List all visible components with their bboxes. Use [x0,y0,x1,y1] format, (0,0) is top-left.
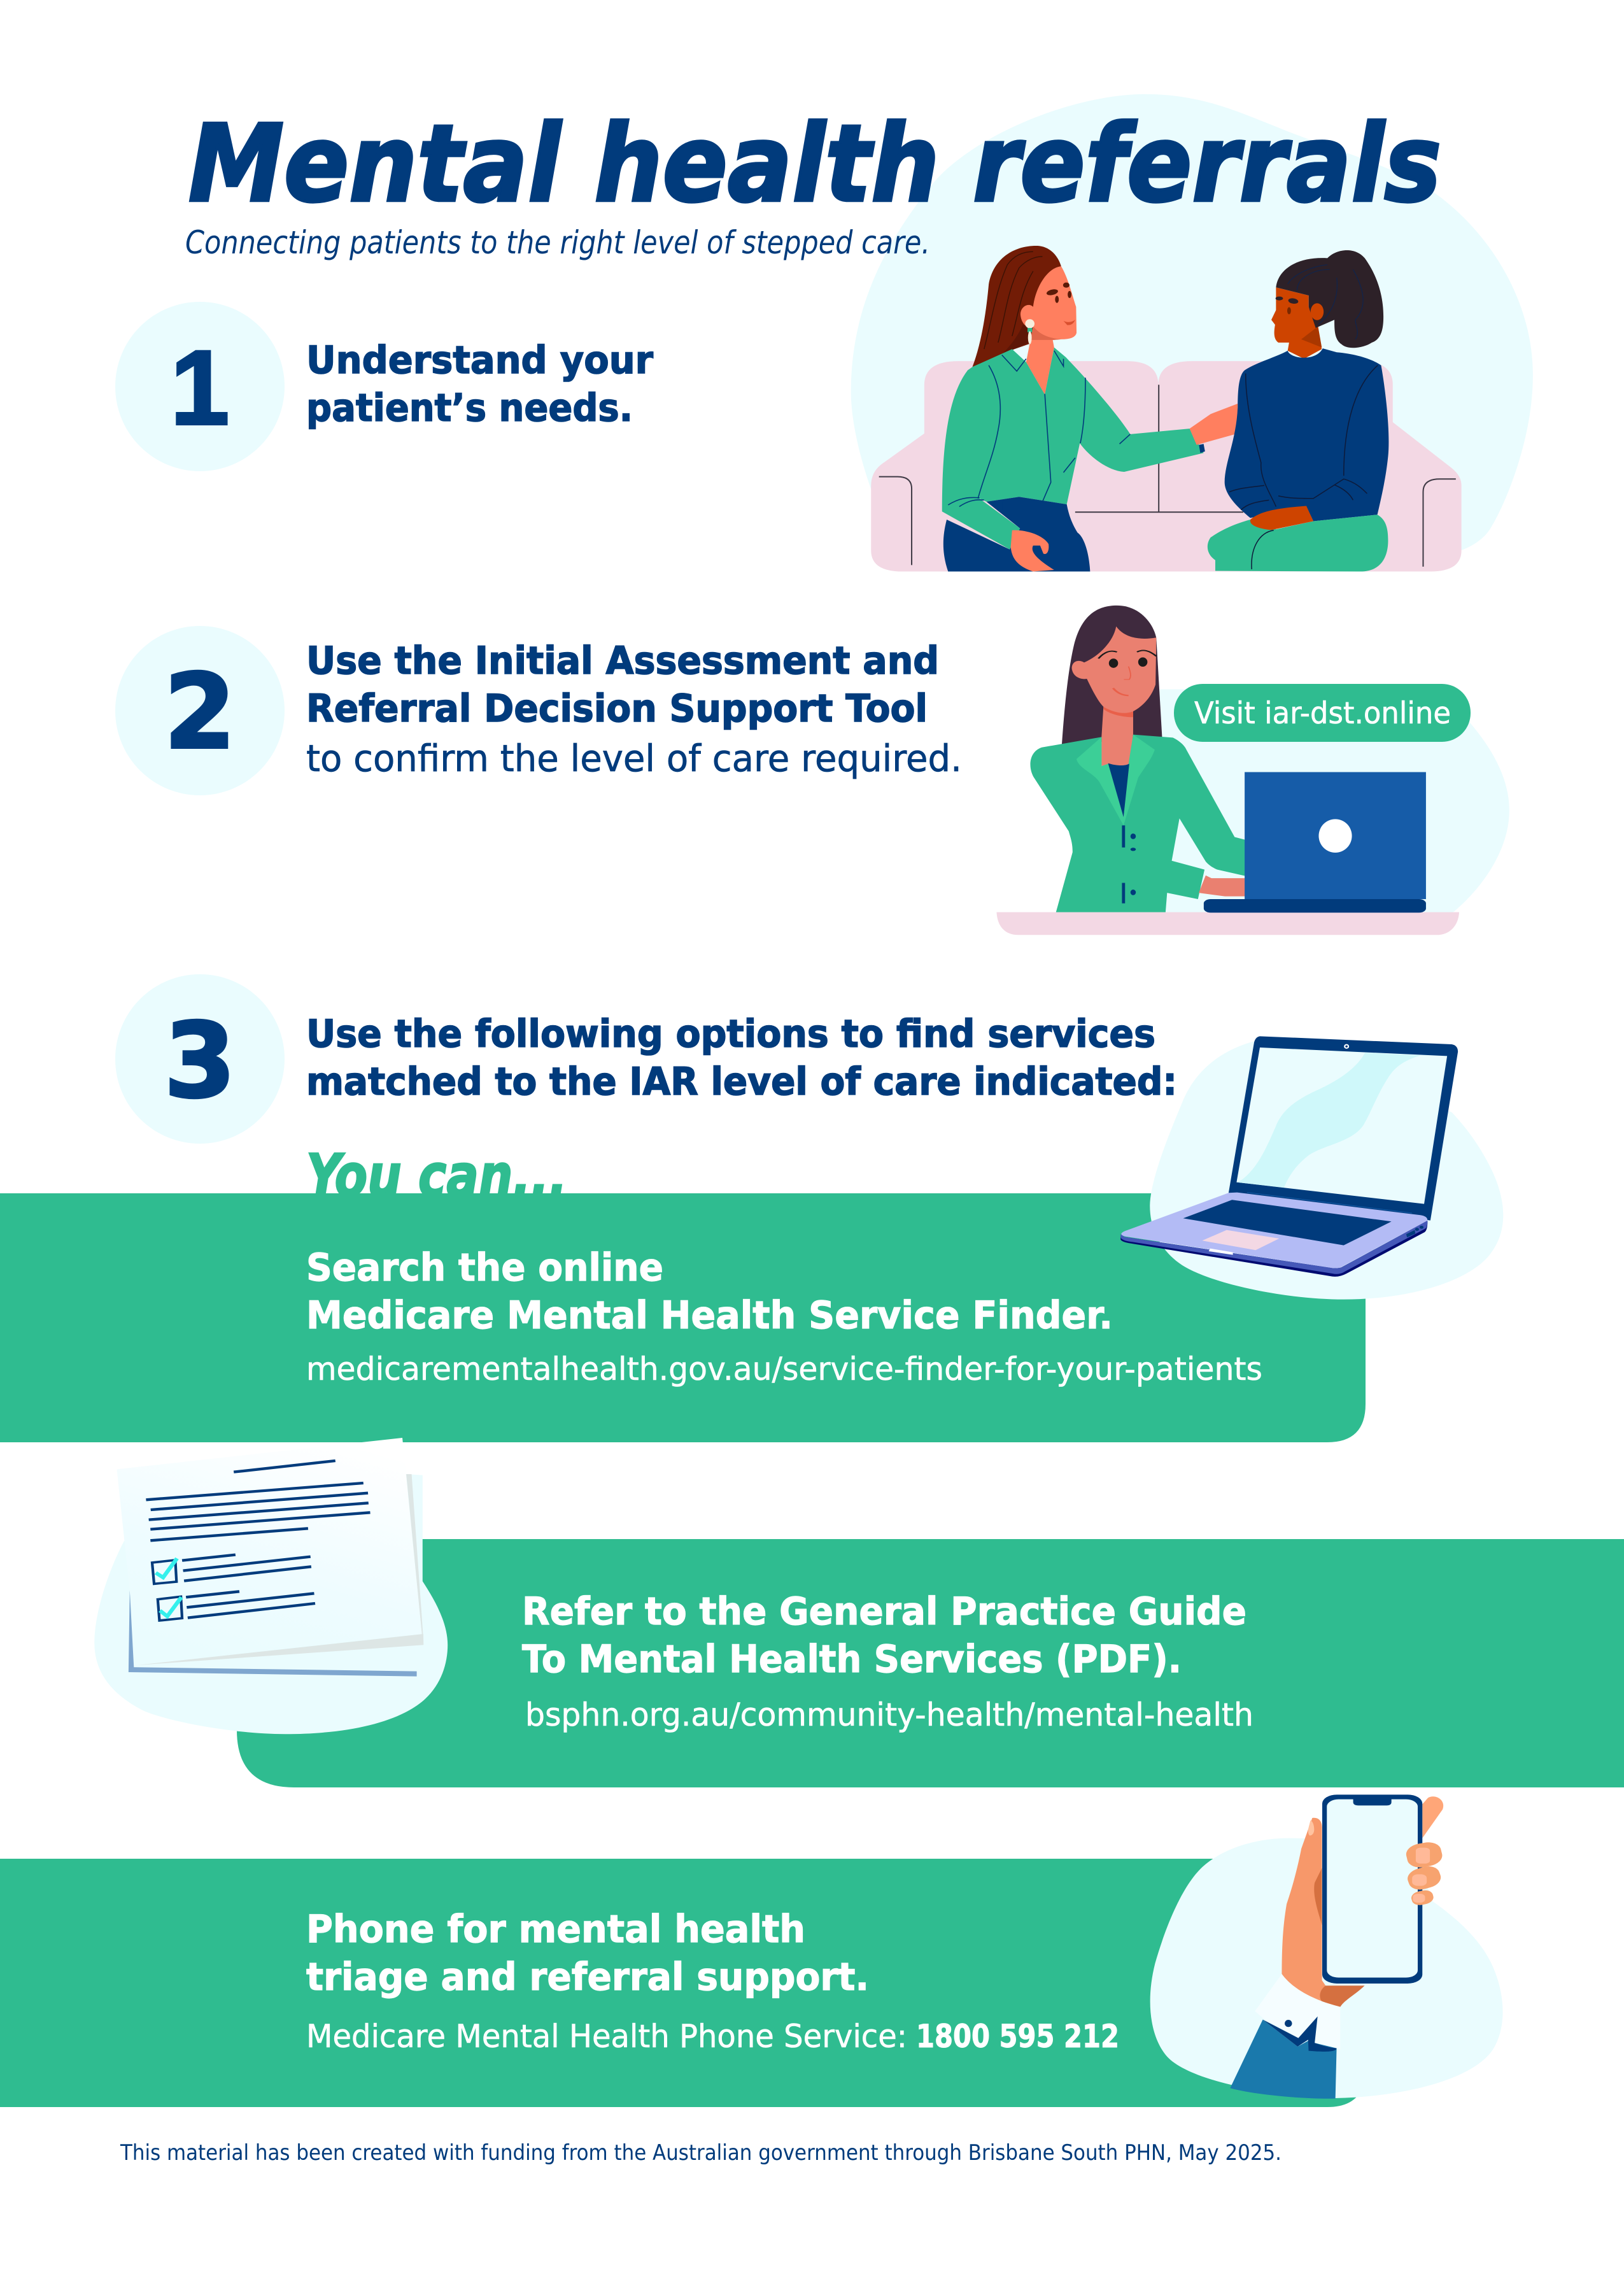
left woman [942,246,1238,572]
background blob: step 1 [851,94,1533,554]
illustration: hand holding phone [1150,1794,1503,2099]
illustration: laptop [1120,1036,1503,1300]
step 1 number badge: 1 [171,329,229,447]
you can heading: You can... [306,1142,567,1210]
step 2 text: to confirm the level of care required. [306,737,962,780]
blob [1150,1838,1503,2098]
step 2 number badge [115,626,285,795]
illustration: paperwork checklist [94,1438,448,1734]
band 3 [0,1859,1366,2107]
band 2 text: bsphn.org.au/community-health/mental-health [525,1696,1253,1733]
band 2 text: To Mental Health Services (PDF). [522,1637,1182,1682]
illustration: woman at laptop [996,606,1509,935]
blob [1159,689,1509,912]
blob [94,1541,448,1734]
band 2 text [522,1589,1253,1733]
fingers [1404,1840,1444,1906]
phone [1322,1794,1422,1984]
couch [871,361,1462,572]
subtitle: Connecting patients to the right level of stepped care. [185,224,930,261]
woman [1030,606,1248,912]
band 3 text: Medicare Mental Health Phone Service: [306,2018,907,2055]
title: Mental health referrals [188,103,1441,226]
step 3 text: Use the following options to find services [306,1012,1155,1056]
band 1 [0,1193,1366,1442]
callout: visit website [1174,684,1471,742]
sleeve [1230,2017,1337,2099]
text lines [146,1461,370,1621]
band 1 text [306,1246,1262,1388]
band 3 text [306,1907,1119,2055]
band 3 text: Phone for mental health [306,1907,805,1952]
footer: This material has been created with funding from the Australian government through Brisbane South PHN, May 2025. [120,2140,1282,2166]
step 2 number badge: 2 [164,653,236,772]
band 3 text: triage and referral support. [306,1955,869,1999]
band 3 text: 1800 595 212 [916,2018,1119,2055]
illustration: two women on a couch [871,246,1462,572]
callout: visit website: Visit iar-dst.online [1194,696,1451,731]
step 2 text: Referral Decision Support Tool [306,686,928,731]
cuff [1255,1974,1340,2049]
right woman [1208,250,1388,572]
laptop lid [1229,1036,1458,1221]
band 1 text: medicarementalhealth.gov.au/service-finder-for-your-patients [306,1351,1262,1388]
blob [1150,1040,1503,1300]
band 2 text: Refer to the General Practice Guide [522,1589,1246,1634]
hand [1282,1796,1443,2007]
laptop [1204,772,1426,912]
band 1 text: Medicare Mental Health Service Finder. [306,1293,1113,1338]
check marks [156,1558,181,1616]
band 2 [237,1539,1624,1787]
step 3 number badge: 3 [164,1002,236,1121]
step 1 text: patient’s needs. [306,386,633,430]
paper stack [117,1438,423,1677]
step 3 number badge [115,974,285,1144]
band 1 text: Search the online [306,1246,663,1290]
desk [996,912,1459,935]
step 3 text [306,1012,1177,1104]
step 2 text: Use the Initial Assessment and [306,639,939,683]
step 2 text [306,639,962,780]
step 1 number badge [115,302,285,471]
laptop base [1120,1193,1427,1277]
step 3 text: matched to the IAR level of care indicated: [306,1060,1177,1104]
step 1 text [306,338,653,430]
step 1 text: Understand your [306,338,653,383]
